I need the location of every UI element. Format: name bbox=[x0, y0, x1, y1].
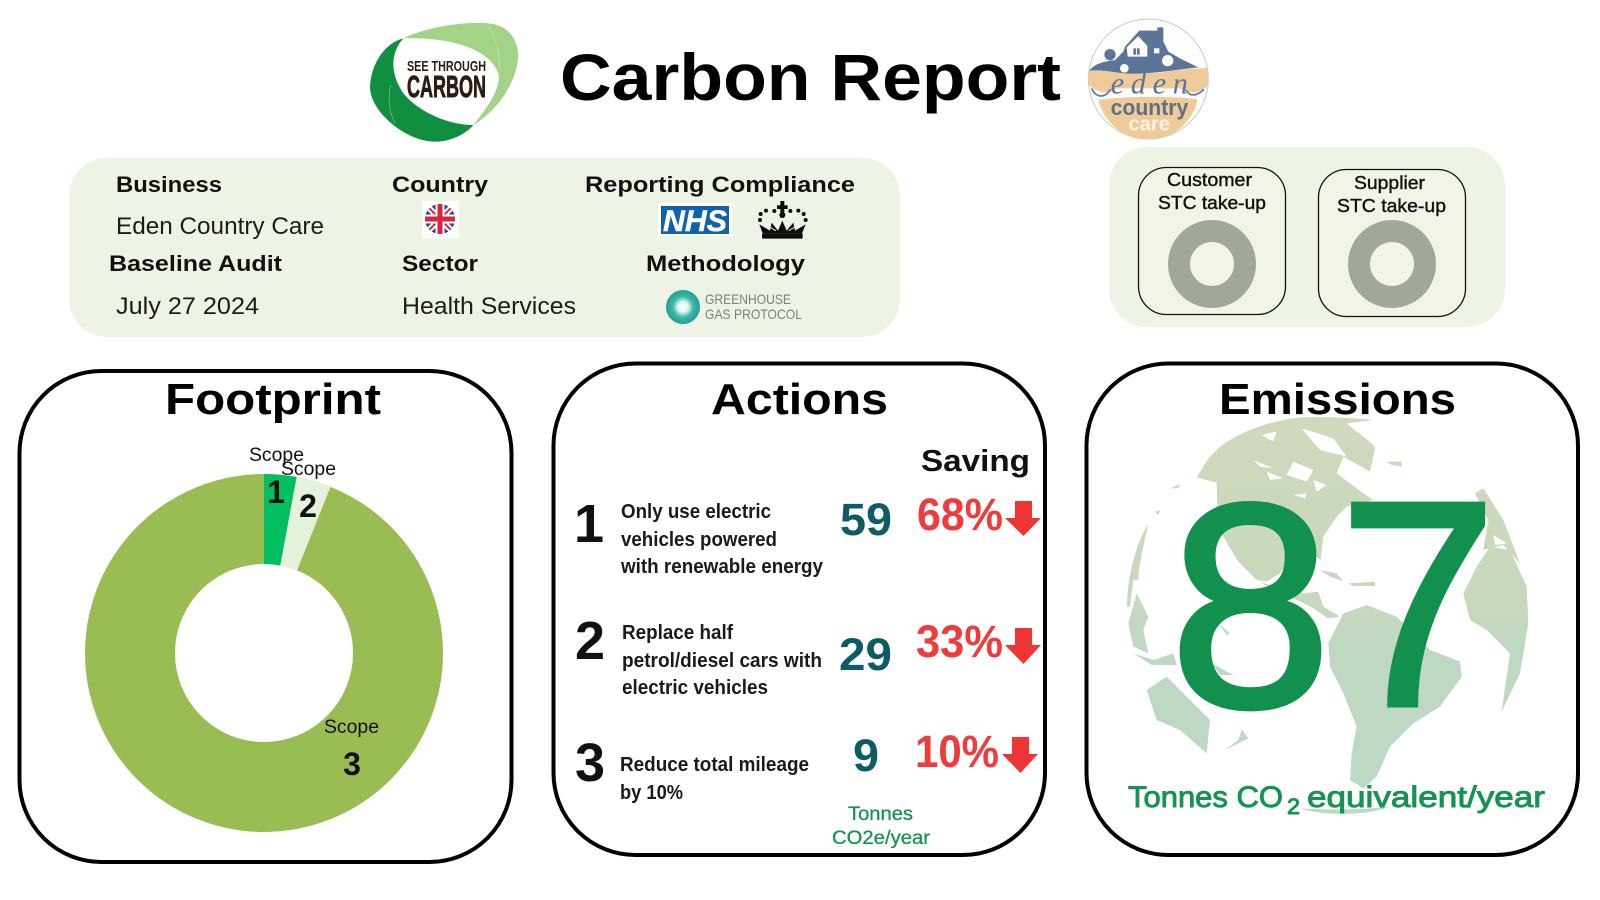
action 2 bbox=[575, 611, 1041, 699]
value: business: Eden Country Care bbox=[116, 213, 324, 240]
action 1: 68% bbox=[917, 489, 1003, 540]
value: baseline audit: July 27 2024 bbox=[116, 293, 259, 320]
unit label: Tonnes bbox=[848, 804, 913, 825]
big number 87: 8 bbox=[1170, 444, 1332, 768]
panel: STC take-up bbox=[1109, 147, 1505, 327]
panel: emissions bbox=[1086, 364, 1578, 855]
action 3: 3 bbox=[575, 733, 605, 793]
logo: Eden Country Care: country bbox=[1111, 95, 1189, 120]
action 2: petrol/diesel cars with bbox=[622, 650, 822, 672]
logo: See Through Carbon bbox=[370, 23, 518, 142]
label: scope 2: 2 bbox=[299, 488, 317, 524]
label: scope 2: Scope bbox=[281, 459, 336, 480]
action 2: 29 bbox=[839, 629, 892, 680]
unit label bbox=[832, 804, 931, 849]
icon: greenhouse gas protocol: GREENHOUSE bbox=[705, 291, 791, 307]
heading: saving: Saving bbox=[921, 443, 1030, 478]
big number 87 bbox=[1170, 441, 1497, 768]
label: business: Business bbox=[116, 172, 222, 197]
action 3 bbox=[575, 726, 1038, 804]
label: scope 1 bbox=[249, 445, 304, 510]
icon: UK flag bbox=[422, 201, 459, 238]
label: scope 3 bbox=[324, 717, 379, 782]
big number 87: 7 bbox=[1339, 441, 1497, 767]
unit label: CO2e/year bbox=[832, 828, 931, 849]
action 2: electric vehicles bbox=[622, 677, 768, 699]
unit: tonnes CO2 equivalent per year: equivalent/year bbox=[1307, 781, 1545, 814]
action 2: Replace half bbox=[622, 622, 733, 644]
card: customer: Customer bbox=[1167, 170, 1252, 190]
unit: tonnes CO2 equivalent per year bbox=[1128, 781, 1545, 819]
icon: greenhouse gas protocol: GAS PROTOCOL bbox=[705, 306, 802, 322]
action 1: Only use electric bbox=[621, 501, 771, 523]
action 3: Reduce total mileage bbox=[620, 754, 809, 776]
action 1: 59 bbox=[840, 494, 892, 545]
donut chart bbox=[130, 474, 398, 787]
heading: emissions: Emissions bbox=[1219, 375, 1456, 424]
label: country: Country bbox=[392, 172, 489, 197]
label: scope 1: 1 bbox=[267, 474, 285, 510]
action 1 bbox=[574, 489, 1041, 578]
panel: footprint bbox=[20, 371, 512, 862]
label: baseline audit: Baseline Audit bbox=[109, 251, 283, 276]
logo: Eden Country Care: care bbox=[1128, 113, 1170, 136]
heading: actions: Actions bbox=[711, 375, 888, 424]
unit: tonnes CO2 equivalent per year: Tonnes CO bbox=[1128, 781, 1283, 814]
logo: Eden Country Care bbox=[1088, 19, 1208, 141]
action 1: vehicles powered bbox=[621, 529, 777, 551]
heading: footprint: Footprint bbox=[165, 375, 381, 424]
globe illustration bbox=[1127, 417, 1528, 814]
unit: tonnes CO2 equivalent per year: 2 bbox=[1287, 794, 1300, 819]
action 1: 1 bbox=[574, 494, 604, 554]
panel: actions bbox=[554, 364, 1045, 855]
logo: See Through Carbon: CARBON bbox=[407, 69, 486, 104]
action 1: with renewable energy bbox=[620, 556, 824, 578]
action 3: 10% bbox=[915, 726, 999, 777]
action 3: 9 bbox=[853, 730, 879, 781]
action 2: 33% bbox=[916, 616, 1003, 667]
card: supplier: STC take-up bbox=[1337, 196, 1446, 216]
value: sector: Health Services bbox=[402, 293, 576, 320]
icon: greenhouse gas protocol bbox=[666, 290, 802, 324]
card: supplier: Supplier bbox=[1354, 173, 1425, 193]
label: scope 1: Scope bbox=[249, 445, 304, 466]
action 2: 2 bbox=[575, 611, 605, 671]
label: sector: Sector bbox=[402, 251, 478, 276]
icon: NHS: NHS bbox=[663, 205, 727, 238]
icon: crown bbox=[758, 201, 808, 239]
card: customer bbox=[1138, 168, 1286, 314]
card: supplier bbox=[1318, 170, 1466, 316]
panel: report details bbox=[69, 158, 900, 337]
label: reporting compliance: Reporting Compliance bbox=[585, 172, 855, 197]
label: scope 2 bbox=[281, 459, 336, 524]
action 3: by 10% bbox=[620, 782, 683, 804]
title: Carbon Report bbox=[560, 40, 1061, 114]
label: scope 3: 3 bbox=[343, 746, 361, 782]
label: methodology: Methodology bbox=[646, 251, 806, 276]
card: customer: STC take-up bbox=[1158, 193, 1266, 213]
label: scope 3: Scope bbox=[324, 717, 379, 738]
logo: See Through Carbon: SEE THROUGH bbox=[407, 58, 486, 75]
logo: Eden Country Care: eden bbox=[1111, 66, 1188, 100]
